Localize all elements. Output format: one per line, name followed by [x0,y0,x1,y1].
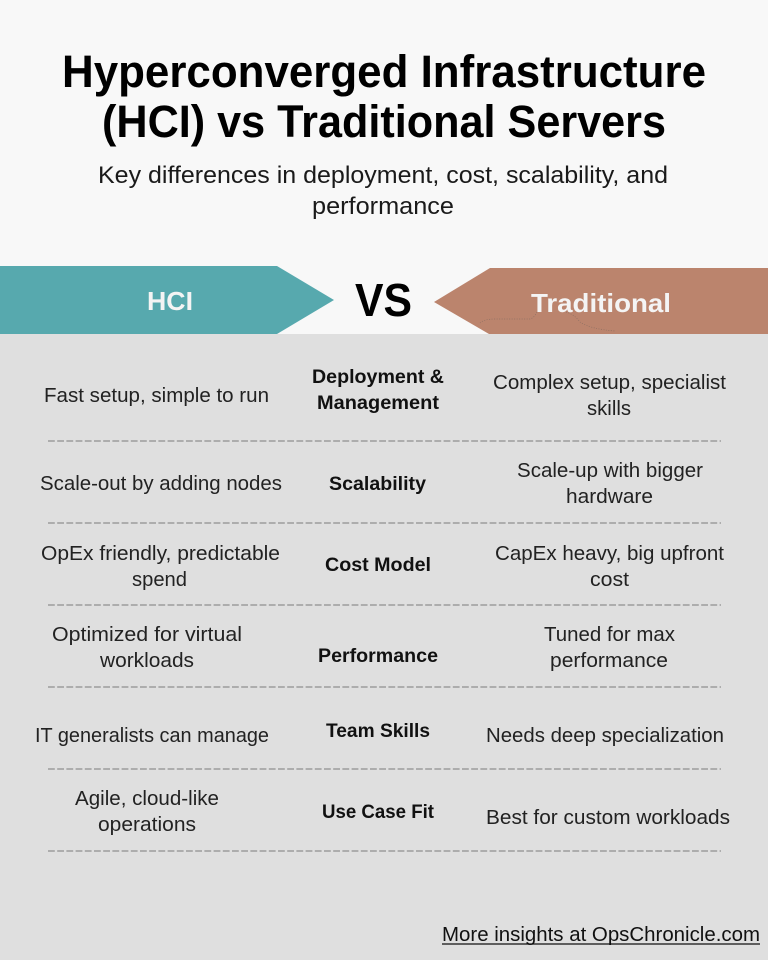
row: Performance: performance [550,650,668,672]
row: Team Skills: Team Skills [326,721,430,742]
row: Team Skills: Needs deep specialization [486,725,724,747]
banner: Traditional: Traditional [531,288,671,318]
subtitle: performance [312,193,454,220]
title: Hyperconverged Infrastructure [62,46,706,97]
row: Performance [52,624,675,672]
subtitle: Key differences in deployment, cost, scalability, and [98,162,668,189]
row: Use Case Fit: operations [98,814,196,836]
row: Deployment and Management: skills [587,398,631,420]
row: Deployment and Management: Fast setup, simple to run [44,385,269,407]
subtitle [98,162,668,220]
title: (HCI) vs Traditional Servers [102,96,666,147]
banner: Traditional [434,268,768,334]
row: Cost Model: Cost Model [325,555,431,576]
banner: HCI [0,266,334,334]
row: Performance: workloads [99,650,194,672]
banner: HCI: HCI [147,286,193,316]
row: Scalability [40,460,703,508]
row: Performance: Tuned for max [544,624,675,646]
row: Cost Model: OpEx friendly, predictable [41,543,280,565]
row: Scalability: Scale-out by adding nodes [40,473,282,495]
row: Cost Model: CapEx heavy, big upfront [495,543,724,565]
VS label: VS [355,274,412,326]
row: Use Case Fit: Use Case Fit [322,802,435,823]
row: Performance: Optimized for virtual [52,624,242,646]
row: Team Skills [35,721,724,747]
row: Cost Model [41,543,724,591]
title [62,46,706,147]
row: Deployment and Management: Management [317,393,440,414]
table background panel [0,334,768,960]
row: Scalability: hardware [566,486,653,508]
row: Deployment and Management: Complex setup, specialist [493,372,726,394]
row: Use Case Fit: Best for custom workloads [486,807,730,829]
footer link text: More insights at OpsChronicle.com [442,924,760,946]
row: Use Case Fit [75,788,730,836]
row: Scalability: Scalability [329,474,426,495]
row: Performance: Performance [318,646,438,667]
row: Deployment and Management: Deployment & [312,367,444,388]
row: Cost Model: cost [590,569,629,591]
row: Deployment and Management [44,367,726,420]
row: Use Case Fit: Agile, cloud-like [75,788,219,810]
row: Cost Model: spend [132,569,187,591]
row: Scalability: Scale-up with bigger [517,460,703,482]
row: Team Skills: IT generalists can manage [35,725,269,747]
